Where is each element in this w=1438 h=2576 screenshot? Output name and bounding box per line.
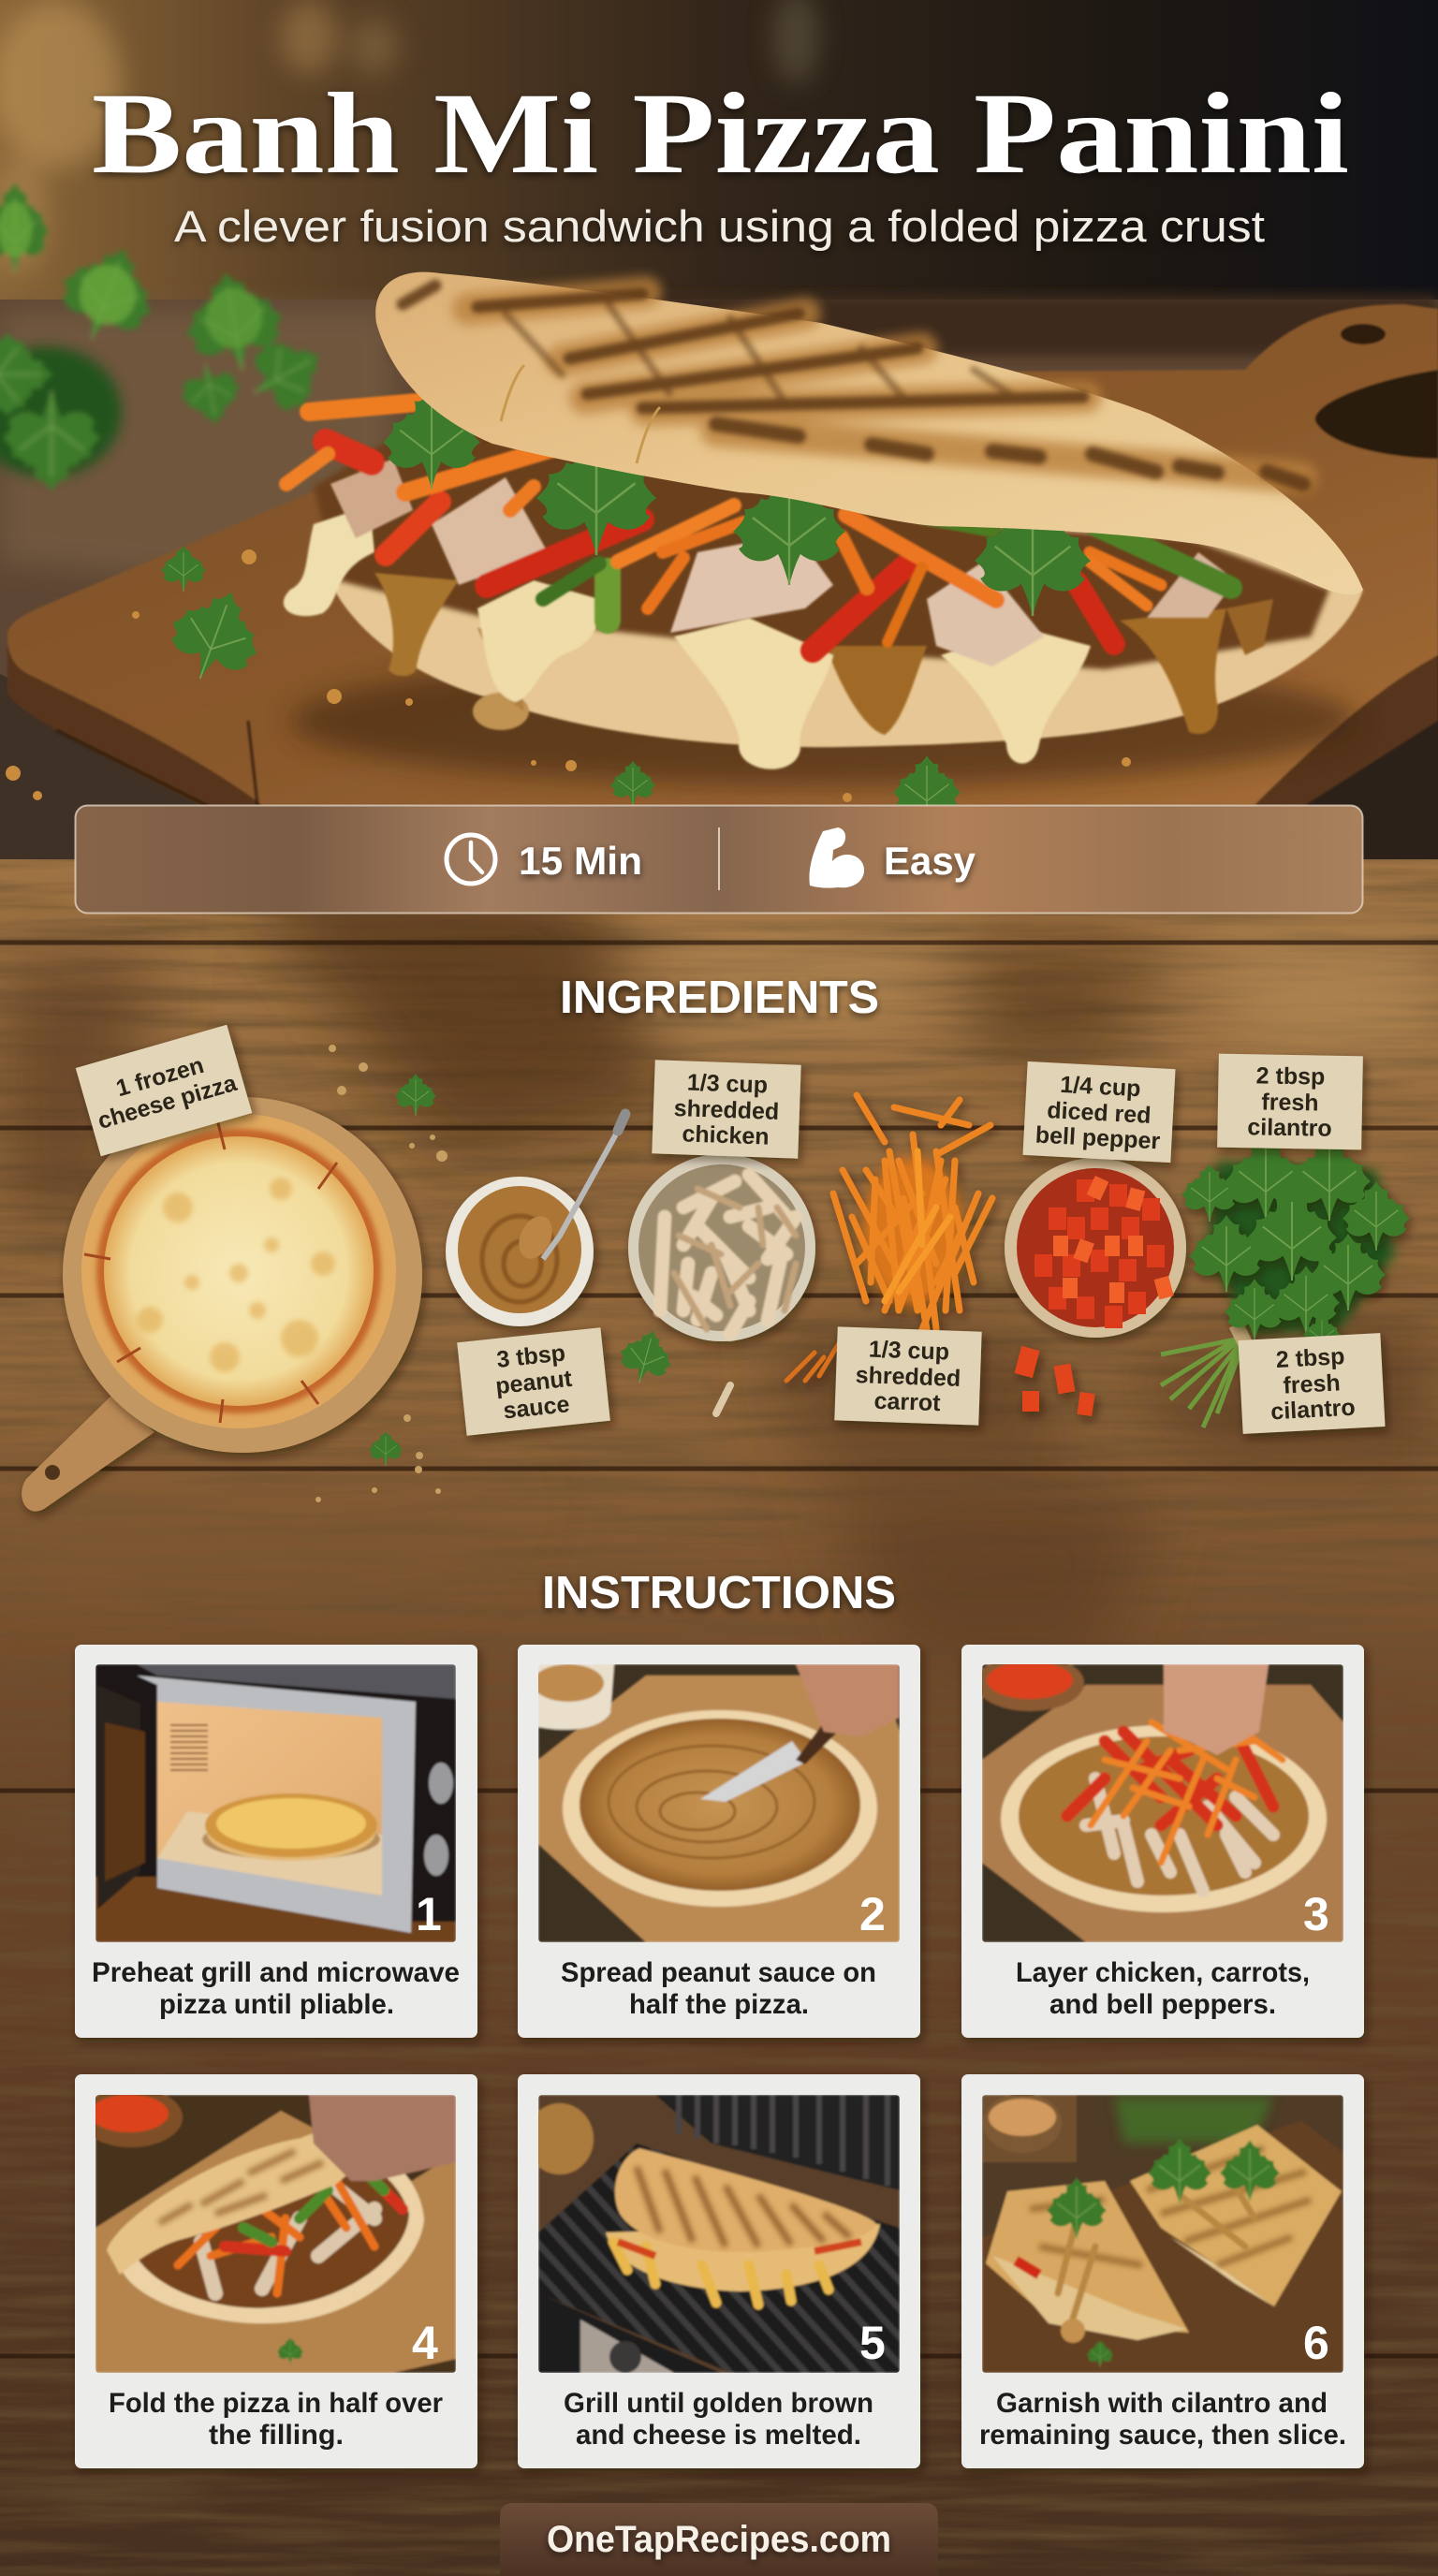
cutting board — [7, 304, 1438, 861]
step 3 card — [961, 1645, 1364, 2038]
hero photo: banh mi panini on cutting board — [0, 0, 1438, 861]
note: shredded chicken: chicken — [682, 1120, 770, 1150]
step 5 illustration: panini press — [526, 2095, 900, 2373]
note: fresh cilantro bottom — [1238, 1333, 1386, 1434]
sandwich: peanut sauce and cheese drips — [284, 505, 1273, 769]
sandwich: filling shadow — [312, 434, 1332, 673]
step 6 caption: Garnish with cilantro and — [996, 2388, 1328, 2419]
step 1 caption: Preheat grill and microwave — [92, 1957, 460, 1988]
note: diced red bell pepper: 1/4 cup — [1060, 1072, 1141, 1102]
note: shredded carrot: 1/3 cup — [868, 1337, 949, 1366]
step 6 illustration: sliced panini with garnish — [982, 2093, 1343, 2373]
sandwich: grilled top bread — [375, 272, 1363, 594]
ingredient: shredded carrots — [786, 1095, 992, 1381]
step 6 caption: remaining sauce, then slice. — [979, 2420, 1346, 2451]
note: frozen cheese pizza: cheese pizza — [95, 1070, 241, 1134]
icon: clock — [447, 835, 495, 884]
note: fresh cilantro bottom: fresh — [1283, 1369, 1341, 1399]
step 3 caption: Layer chicken, carrots, — [1016, 1957, 1310, 1988]
ingredient: peanut sauce bowl — [446, 1114, 627, 1326]
step number 5: 5 — [859, 2317, 886, 2369]
step number 6: 6 — [1303, 2317, 1329, 2369]
step 2 caption: half the pizza. — [629, 1989, 809, 2020]
step 6 card — [961, 2074, 1364, 2468]
title: Banh Mi Pizza Panini — [92, 69, 1349, 198]
note: shredded carrot: carrot — [873, 1388, 942, 1416]
stat: time: 15 Min — [519, 839, 642, 883]
step 6 caption — [979, 2388, 1346, 2451]
step 2 caption — [561, 1957, 876, 2020]
step 2 caption: Spread peanut sauce on — [561, 1957, 876, 1988]
small garnish leaves and crumbs — [315, 1045, 730, 1502]
step 1 illustration: microwave — [95, 1664, 456, 1942]
step number 4: 4 — [412, 2317, 438, 2369]
note: fresh cilantro top — [1217, 1054, 1363, 1149]
note: shredded carrot: shredded — [855, 1362, 961, 1392]
note: fresh cilantro bottom: cilantro — [1270, 1395, 1356, 1425]
heading: ingredients: INGREDIENTS — [560, 973, 879, 1023]
note: shredded chicken: 1/3 cup — [686, 1070, 768, 1099]
icon: flexed arm — [809, 827, 864, 888]
step 4 illustration: folding the pizza — [80, 2087, 456, 2373]
step number 1: 1 — [416, 1888, 442, 1940]
step 5 caption — [564, 2388, 873, 2451]
note: diced red bell pepper — [1022, 1061, 1176, 1163]
ingredient: fresh cilantro bunch — [1161, 1136, 1410, 1427]
step 3 caption: and bell peppers. — [1049, 1989, 1276, 2020]
stat: difficulty: Easy — [884, 839, 976, 883]
note: shredded chicken: shredded — [673, 1095, 780, 1125]
step 5 card — [518, 2074, 920, 2468]
ingredient: diced red bell pepper bowl — [1005, 1158, 1186, 1416]
step 4 caption: Fold the pizza in half over — [109, 2388, 443, 2419]
ingredient: pizza on wooden board — [22, 1097, 422, 1512]
step 1 caption: pizza until pliable. — [159, 1989, 394, 2020]
note: diced red bell pepper: bell pepper — [1034, 1121, 1161, 1154]
step 2 card — [518, 1645, 920, 2038]
crumbs on board — [6, 549, 1131, 802]
stats bar — [75, 805, 1363, 914]
note: peanut sauce — [457, 1327, 610, 1436]
step number 3: 3 — [1303, 1888, 1329, 1940]
wood plank background — [0, 842, 1438, 2576]
step 5 caption: Grill until golden brown — [564, 2388, 873, 2419]
heading: instructions: INSTRUCTIONS — [542, 1568, 896, 1618]
note: peanut sauce: peanut — [494, 1366, 574, 1399]
step 2 illustration: spreading peanut sauce — [533, 1664, 900, 1942]
note: fresh cilantro top: fresh — [1261, 1089, 1319, 1117]
note: diced red bell pepper: diced red — [1047, 1097, 1152, 1129]
step 5 caption: and cheese is melted. — [576, 2420, 861, 2451]
note: fresh cilantro top: cilantro — [1247, 1114, 1332, 1142]
footer badge — [500, 2503, 938, 2576]
step 3 illustration: layering toppings — [976, 1655, 1343, 1942]
step 4 caption: the filling. — [209, 2420, 344, 2451]
note: shredded carrot — [834, 1326, 982, 1426]
note: fresh cilantro top: 2 tbsp — [1255, 1062, 1326, 1090]
note: peanut sauce: 3 tbsp — [495, 1339, 566, 1373]
subtitle: A clever fusion sandwich using a folded pizza crust — [174, 201, 1265, 251]
sandwich shadow — [290, 655, 1357, 786]
sandwich: bottom bread — [335, 528, 1364, 749]
step 4 card — [75, 2074, 477, 2468]
step 1 caption — [92, 1957, 460, 2020]
sandwich: filling vegetables and chicken — [286, 402, 1236, 666]
footer website text: OneTapRecipes.com — [547, 2519, 891, 2560]
step number 2: 2 — [859, 1888, 886, 1940]
step 3 caption — [1016, 1957, 1310, 2020]
step 1 card — [75, 1645, 477, 2038]
note: frozen cheese pizza — [76, 1025, 252, 1156]
icon: blurred cilantro at left — [0, 183, 338, 491]
note: peanut sauce: sauce — [502, 1391, 571, 1424]
note: frozen cheese pizza: 1 frozen — [113, 1052, 207, 1102]
step 4 caption — [109, 2388, 443, 2451]
sandwich: cilantro leaves — [157, 388, 1091, 825]
note: fresh cilantro bottom: 2 tbsp — [1275, 1343, 1345, 1373]
note: shredded chicken — [652, 1060, 801, 1159]
ingredient: shredded chicken bowl — [628, 1154, 815, 1341]
